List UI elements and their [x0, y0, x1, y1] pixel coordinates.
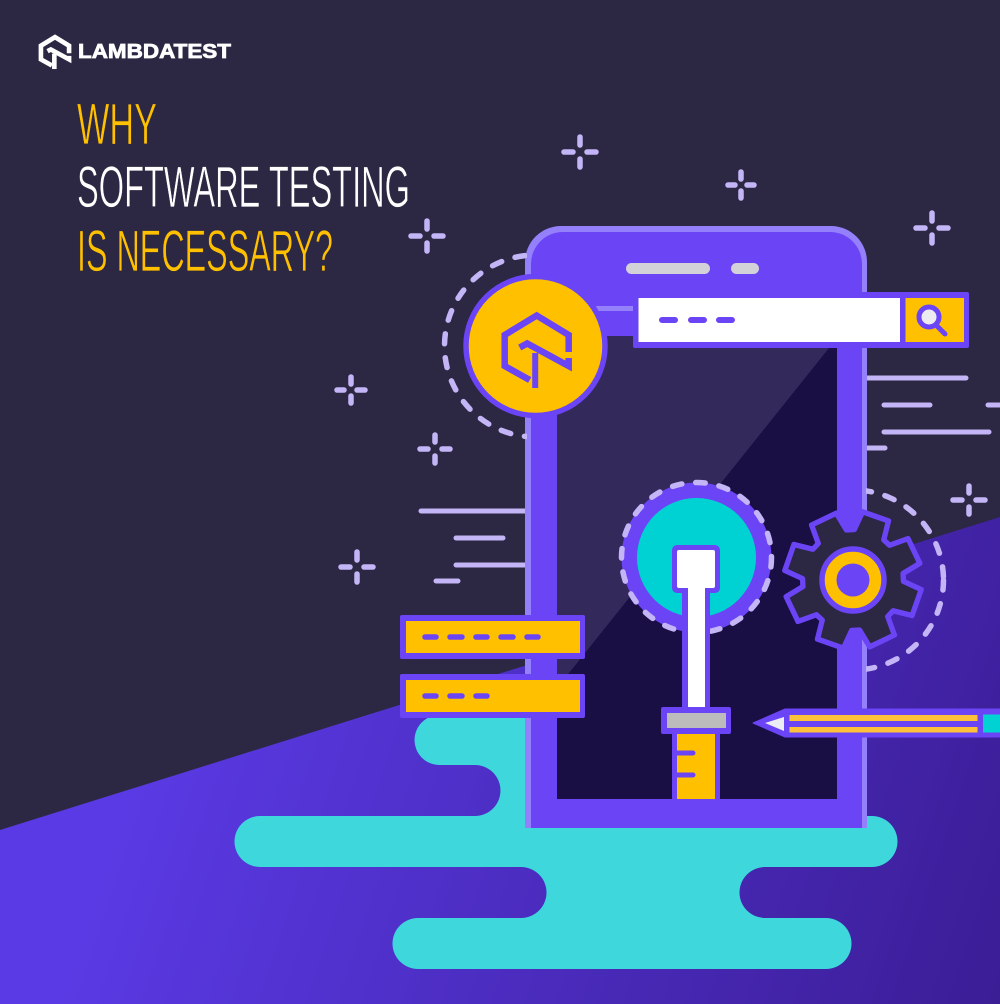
teal liquid blob: [235, 715, 898, 969]
pencil body: [753, 709, 1000, 737]
brand logo: [41, 37, 232, 69]
dial purple ring: [622, 482, 772, 632]
bar fill: [406, 621, 580, 653]
screwdriver: [661, 545, 731, 800]
handle ticks: [677, 753, 693, 775]
handle yellow: [677, 734, 715, 799]
speaker: [626, 263, 710, 274]
handle: [672, 730, 720, 800]
collar grey: [667, 713, 726, 728]
icon: LambdaTest hexagon: [41, 37, 69, 69]
title line 3: IS NECESSARY?: [77, 219, 333, 284]
gear hole: [836, 564, 870, 596]
pencil: [753, 709, 1000, 737]
pencil eraser: [983, 714, 1000, 732]
pencil stripe bottom: [790, 727, 978, 732]
search input: [638, 298, 900, 342]
badge disc: [466, 276, 605, 416]
list bar top: [400, 615, 585, 659]
search button: [906, 298, 964, 342]
icon: LambdaTest hexagon: [505, 316, 569, 388]
search bar frame: [633, 292, 969, 348]
sparkles: [337, 137, 985, 582]
diagonal purple band: [0, 517, 1000, 1004]
dial teal centre: [637, 498, 756, 617]
list bar bottom: [400, 674, 585, 718]
speed lines left: [421, 511, 530, 581]
tool outline: [672, 545, 720, 707]
speed lines right: [864, 378, 1000, 448]
title line 1: WHY: [77, 92, 157, 157]
top light strip: [596, 306, 636, 311]
dial dashed edge: [622, 482, 772, 632]
bar frame: [400, 674, 585, 718]
collar: [661, 707, 731, 734]
gear hub: [822, 549, 884, 611]
placeholder dashes: [662, 317, 732, 323]
phone: [525, 226, 867, 828]
brand name: LAMBDATEST: [78, 40, 232, 63]
icon: magnifier: [919, 307, 945, 334]
camera: [731, 263, 759, 274]
screwdriver dial: [622, 482, 772, 632]
bar dashes: [425, 634, 538, 640]
tool white tip: [677, 550, 715, 707]
gear body: [785, 512, 921, 648]
bar frame: [400, 615, 585, 659]
phone body: [531, 232, 862, 828]
bar fill: [406, 680, 580, 712]
pencil stripe top: [790, 715, 978, 721]
screen: [557, 336, 837, 799]
phone light edge: [525, 226, 867, 828]
icon: gear: [785, 512, 921, 648]
screen glare: [557, 336, 837, 688]
dashed ring around logo: [442, 252, 527, 440]
logo badge: [466, 276, 605, 416]
title line 2: SOFTWARE TESTING: [77, 155, 410, 220]
title: [77, 92, 410, 284]
bar dashes: [425, 693, 487, 699]
dashed ring around gear: [866, 488, 946, 672]
pencil tip: [765, 717, 784, 731]
search bar: [633, 292, 969, 348]
